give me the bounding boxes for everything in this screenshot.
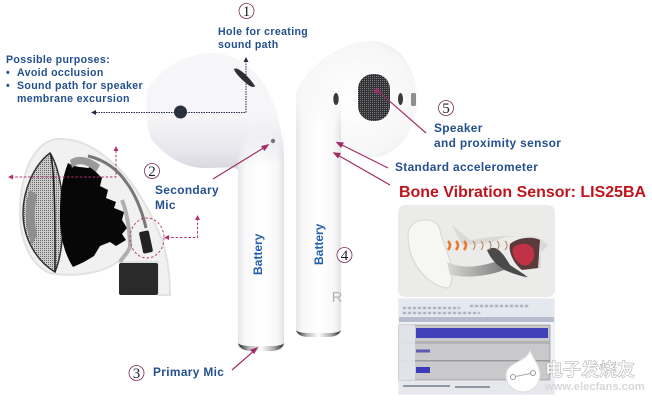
flex strip <box>88 156 146 228</box>
marker 3 <box>129 366 144 382</box>
lower flex <box>120 200 130 262</box>
label: secondary mic: Mic <box>155 198 176 212</box>
magenta pointer arrows <box>213 89 426 370</box>
label: possible purposes: • <box>6 67 10 79</box>
right AirPod vents <box>333 93 416 106</box>
upper dome part <box>70 157 100 172</box>
primary mic tip <box>238 343 284 351</box>
heading: bone vibration sensor: Bone Vibration Sensor: LIS25BA <box>399 184 646 201</box>
track three <box>399 361 550 380</box>
secondary mic hole <box>271 139 275 143</box>
marker 4 <box>337 248 352 264</box>
label: possible purposes: membrane excursion <box>17 93 130 105</box>
marker 5: 5 <box>442 101 450 117</box>
label: possible purposes: Sound path for speaker <box>17 80 143 92</box>
watermark <box>506 350 645 393</box>
marker 3: 3 <box>133 366 140 382</box>
panel: audio waveform screenshot <box>398 298 555 395</box>
ear tip mesh <box>23 153 63 272</box>
side vent <box>174 106 187 118</box>
status bar <box>399 381 554 394</box>
sound wave arcs <box>448 241 466 250</box>
R mark: R <box>332 289 343 306</box>
label: hole: Hole for creating <box>218 26 308 38</box>
track one wave <box>416 328 548 338</box>
driver dark mass <box>60 163 127 267</box>
magenta dashed circle <box>130 218 164 258</box>
watermark url: www.elecfans.com <box>544 381 645 393</box>
label: accelerometer: Standard accelerometer <box>395 160 538 174</box>
panel: bone conduction illustration <box>398 205 555 297</box>
marker 4: 4 <box>341 248 349 264</box>
battery labels: Battery <box>251 233 265 275</box>
dark ear bones <box>487 248 528 277</box>
right AirPod stem <box>296 100 341 337</box>
magenta dashed arrows <box>11 150 198 238</box>
left AirPod stem <box>238 130 284 352</box>
marker 2: 2 <box>148 164 156 180</box>
track controls <box>399 325 415 380</box>
track two wave <box>416 350 430 352</box>
left AirPod head <box>146 53 284 170</box>
battery labels <box>251 223 326 275</box>
cochlea <box>513 244 534 265</box>
accelerometer module <box>139 230 153 254</box>
outer shell <box>20 139 170 295</box>
marker 2 <box>144 164 160 180</box>
black sound path arrows <box>96 62 246 112</box>
x-ray battery <box>119 263 158 295</box>
right AirPod <box>296 41 417 337</box>
watermark text: 电子发烧友 <box>545 359 635 380</box>
track two <box>399 343 550 360</box>
dotted guide arrows <box>8 57 248 240</box>
label: possible purposes: Avoid occlusion <box>17 67 104 79</box>
track three wave <box>416 367 430 373</box>
label: possible purposes: Possible purposes: <box>6 54 110 66</box>
left AirPod <box>146 53 284 352</box>
ear tip gray band <box>26 190 37 245</box>
marker 1 <box>239 4 254 20</box>
track one <box>399 325 550 342</box>
right tip <box>296 330 341 337</box>
ear tip center rib <box>50 153 55 272</box>
cochlea chamber <box>510 238 540 270</box>
label: possible purposes: • <box>6 80 10 92</box>
right AirPod head <box>296 41 417 157</box>
label: speaker: Speaker <box>434 121 483 135</box>
label: speaker: and proximity sensor <box>434 136 561 150</box>
ear outline <box>408 220 452 288</box>
watermark logo <box>506 350 540 392</box>
speaker mesh <box>358 74 390 121</box>
battery labels: Battery <box>312 223 326 265</box>
marker 5 <box>438 100 454 117</box>
marker 1: 1 <box>243 4 250 20</box>
label: primary mic: Primary Mic <box>153 365 224 379</box>
x-ray cutaway <box>20 139 170 295</box>
label: secondary mic: Secondary <box>155 183 219 197</box>
ear canal <box>447 262 527 278</box>
skull section <box>452 225 548 270</box>
toolbar <box>399 299 554 317</box>
label: hole: sound path <box>218 39 279 51</box>
sound hole <box>234 69 255 87</box>
number markers <box>129 4 454 382</box>
